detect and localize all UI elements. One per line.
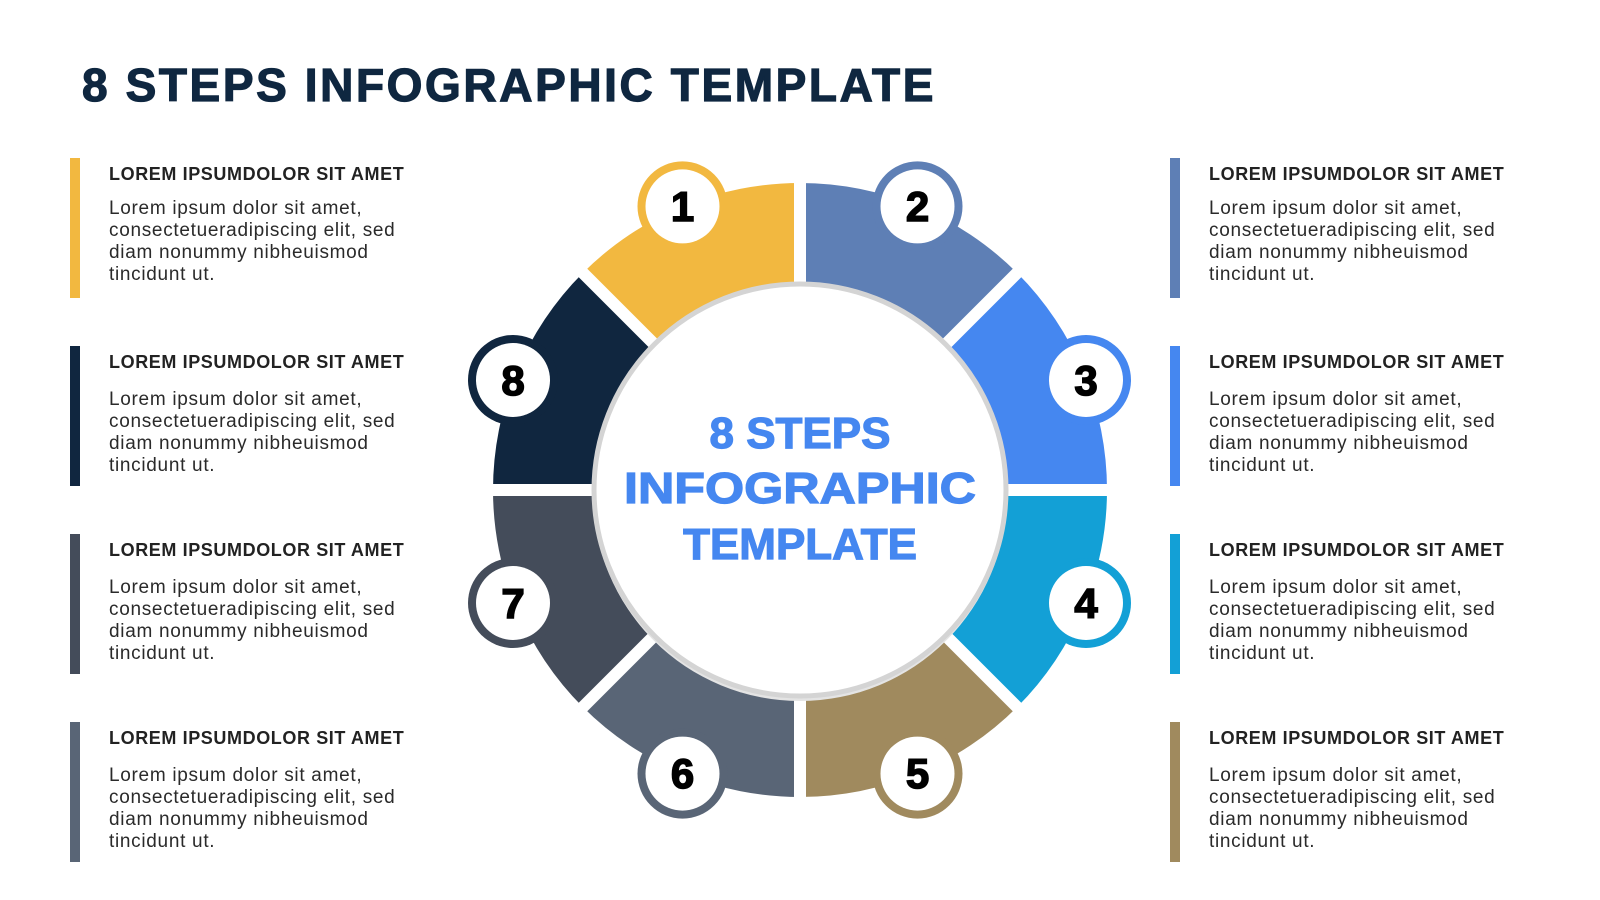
center circle: INFOGRAPHIC [624, 464, 976, 513]
step 6 text [70, 722, 404, 862]
segment 4 [941, 490, 1107, 707]
badge 6 [638, 729, 728, 819]
badge 3: 3 [1074, 357, 1098, 404]
step 4 text: LOREM IPSUMDOLOR SIT AMET [1209, 540, 1504, 560]
segment 2 [800, 183, 1017, 349]
badge 4 [1041, 558, 1131, 648]
badge 5: 5 [906, 750, 929, 797]
step 2 text: diam nonummy nibheuismod [1209, 242, 1469, 263]
step 1 text: diam nonummy nibheuismod [109, 242, 369, 263]
segment 8 [493, 273, 659, 490]
step 3 text: consectetueradipiscing elit, sed [1209, 411, 1495, 432]
step 7 text: Lorem ipsum dolor sit amet, [109, 577, 362, 598]
badge 4: 4 [1074, 580, 1098, 627]
segment 1 [583, 183, 800, 349]
segment 5 [800, 631, 1017, 797]
step 4 text: consectetueradipiscing elit, sed [1209, 599, 1495, 620]
step 5 text: tincidunt ut. [1209, 831, 1315, 852]
step 5 text [1170, 722, 1504, 862]
center circle: 8 STEPS [710, 409, 890, 458]
badge 5 [872, 729, 962, 819]
step 6 text: consectetueradipiscing elit, sed [109, 787, 395, 808]
step 3 text: diam nonummy nibheuismod [1209, 433, 1469, 454]
step 2 text: Lorem ipsum dolor sit amet, [1209, 198, 1462, 219]
badge 1: 1 [671, 183, 694, 230]
step 5 text: Lorem ipsum dolor sit amet, [1209, 765, 1462, 786]
step 1 text: consectetueradipiscing elit, sed [109, 220, 395, 241]
step 2 text: consectetueradipiscing elit, sed [1209, 220, 1495, 241]
badge 2 [872, 161, 962, 251]
badge 7: 7 [501, 580, 525, 627]
step 1 text [70, 158, 404, 298]
step 3 text: Lorem ipsum dolor sit amet, [1209, 389, 1462, 410]
step 3 text: tincidunt ut. [1209, 455, 1315, 476]
step 8 text: Lorem ipsum dolor sit amet, [109, 389, 362, 410]
step 6 text: diam nonummy nibheuismod [109, 809, 369, 830]
title: 8 STEPS INFOGRAPHIC TEMPLATE [82, 59, 936, 111]
center circle [593, 284, 1007, 701]
step 3 text [1170, 346, 1504, 486]
badge 3 [1041, 335, 1131, 425]
step 2 text: tincidunt ut. [1209, 264, 1315, 285]
segment 6 [583, 631, 800, 797]
segment 3 [941, 273, 1107, 490]
step 4 text: tincidunt ut. [1209, 643, 1315, 664]
step 7 text: consectetueradipiscing elit, sed [109, 599, 395, 620]
step 8 text: consectetueradipiscing elit, sed [109, 411, 395, 432]
step 5 text: consectetueradipiscing elit, sed [1209, 787, 1495, 808]
badge 1 [638, 161, 728, 251]
step 5 text: diam nonummy nibheuismod [1209, 809, 1469, 830]
step 2 text [1170, 158, 1504, 298]
badge 2: 2 [906, 183, 929, 230]
step 6 text: Lorem ipsum dolor sit amet, [109, 765, 362, 786]
step 8 text: tincidunt ut. [109, 455, 215, 476]
step 2 text: LOREM IPSUMDOLOR SIT AMET [1209, 164, 1504, 184]
step 7 text: diam nonummy nibheuismod [109, 621, 369, 642]
step 7 text: tincidunt ut. [109, 643, 215, 664]
step 3 text: LOREM IPSUMDOLOR SIT AMET [1209, 352, 1504, 372]
step 8 text [70, 346, 404, 486]
step 4 text: diam nonummy nibheuismod [1209, 621, 1469, 642]
step 1 text: Lorem ipsum dolor sit amet, [109, 198, 362, 219]
badge 8: 8 [501, 357, 525, 404]
step 7 text: LOREM IPSUMDOLOR SIT AMET [109, 540, 404, 560]
step 6 text: LOREM IPSUMDOLOR SIT AMET [109, 728, 404, 748]
step 5 text: LOREM IPSUMDOLOR SIT AMET [1209, 728, 1504, 748]
step 8 text: LOREM IPSUMDOLOR SIT AMET [109, 352, 404, 372]
step 8 text: diam nonummy nibheuismod [109, 433, 369, 454]
step 4 text [1170, 534, 1504, 674]
badge 7 [468, 558, 558, 648]
badge 6: 6 [671, 750, 694, 797]
badge 8 [468, 335, 558, 425]
center circle: TEMPLATE [683, 520, 917, 569]
step 1 text: LOREM IPSUMDOLOR SIT AMET [109, 164, 404, 184]
segment 7 [493, 490, 659, 707]
step 4 text: Lorem ipsum dolor sit amet, [1209, 577, 1462, 598]
step 7 text [70, 534, 404, 674]
step 1 text: tincidunt ut. [109, 264, 215, 285]
step 6 text: tincidunt ut. [109, 831, 215, 852]
